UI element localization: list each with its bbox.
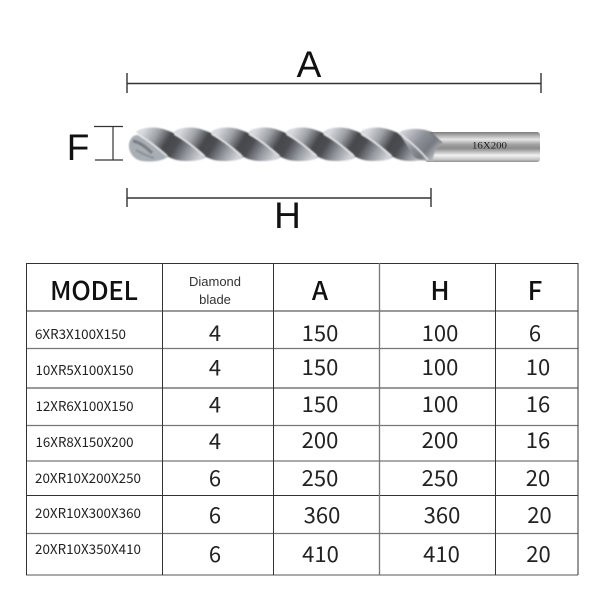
- specification table: [26, 263, 578, 575]
- row 5: 250: [422, 461, 458, 493]
- drill shank: 16X200: [472, 142, 507, 152]
- row 5: 250: [302, 461, 338, 493]
- row 3: [36, 387, 550, 420]
- row 7: 410: [423, 537, 460, 569]
- dimension H: H: [274, 195, 301, 236]
- row 1: 4: [209, 316, 221, 348]
- row 5: 6: [209, 461, 221, 493]
- dimension F: F: [67, 127, 89, 168]
- row 1: 6XR3X100X150: [35, 323, 126, 343]
- row 7: 410: [302, 537, 339, 569]
- row 1: 150: [302, 316, 338, 348]
- row 4: 200: [422, 423, 458, 455]
- dimension A: A: [297, 44, 322, 85]
- icon: drill bit: [129, 128, 540, 162]
- table header: Diamond: [189, 274, 241, 289]
- row 3: 16: [526, 387, 550, 419]
- table header: MODEL: [50, 271, 138, 308]
- dimension H: [127, 188, 431, 236]
- row 1: [35, 316, 541, 348]
- row 7: 6: [209, 537, 221, 569]
- row 7: 20XR10X350X410: [35, 538, 141, 558]
- row 5: 20XR10X200X250: [35, 467, 141, 487]
- row 2: 10XR5X100X150: [36, 359, 134, 379]
- row 2: 150: [302, 350, 338, 382]
- row 1: 100: [422, 316, 458, 348]
- row 3: 4: [209, 388, 221, 420]
- row 6: [35, 498, 552, 530]
- row 6: 20: [527, 498, 552, 530]
- row 4: [36, 423, 550, 456]
- row 4: 16: [526, 423, 550, 455]
- row 7: [35, 537, 551, 569]
- row 2: 4: [209, 350, 221, 382]
- dimension F: [67, 126, 123, 168]
- drill flutes: [129, 128, 442, 162]
- row 7: 20: [526, 537, 551, 569]
- row 5: 20: [526, 461, 550, 493]
- table header: A: [312, 271, 329, 308]
- row 1: 6: [529, 316, 541, 348]
- row 5: [35, 461, 550, 493]
- row 3: 150: [302, 387, 338, 419]
- row 6: 360: [304, 498, 340, 530]
- row 4: 4: [209, 424, 221, 456]
- row 3: 12XR6X100X150: [36, 395, 134, 415]
- drill shank: [425, 132, 540, 162]
- table header: F: [528, 271, 542, 308]
- row 4: 16XR8X150X200: [36, 431, 134, 451]
- row 6: 360: [424, 498, 460, 530]
- row 2: 10: [526, 350, 550, 382]
- dimension A: [127, 44, 541, 93]
- table header: H: [430, 271, 450, 308]
- row 2: [36, 350, 550, 382]
- table header: [50, 271, 542, 308]
- table grid: [26, 263, 578, 575]
- row 4: 200: [302, 423, 338, 455]
- row 6: 20XR10X300X360: [35, 502, 141, 522]
- row 2: 100: [422, 350, 458, 382]
- row 6: 6: [209, 498, 221, 530]
- table header: blade: [199, 292, 231, 307]
- row 3: 100: [422, 387, 458, 419]
